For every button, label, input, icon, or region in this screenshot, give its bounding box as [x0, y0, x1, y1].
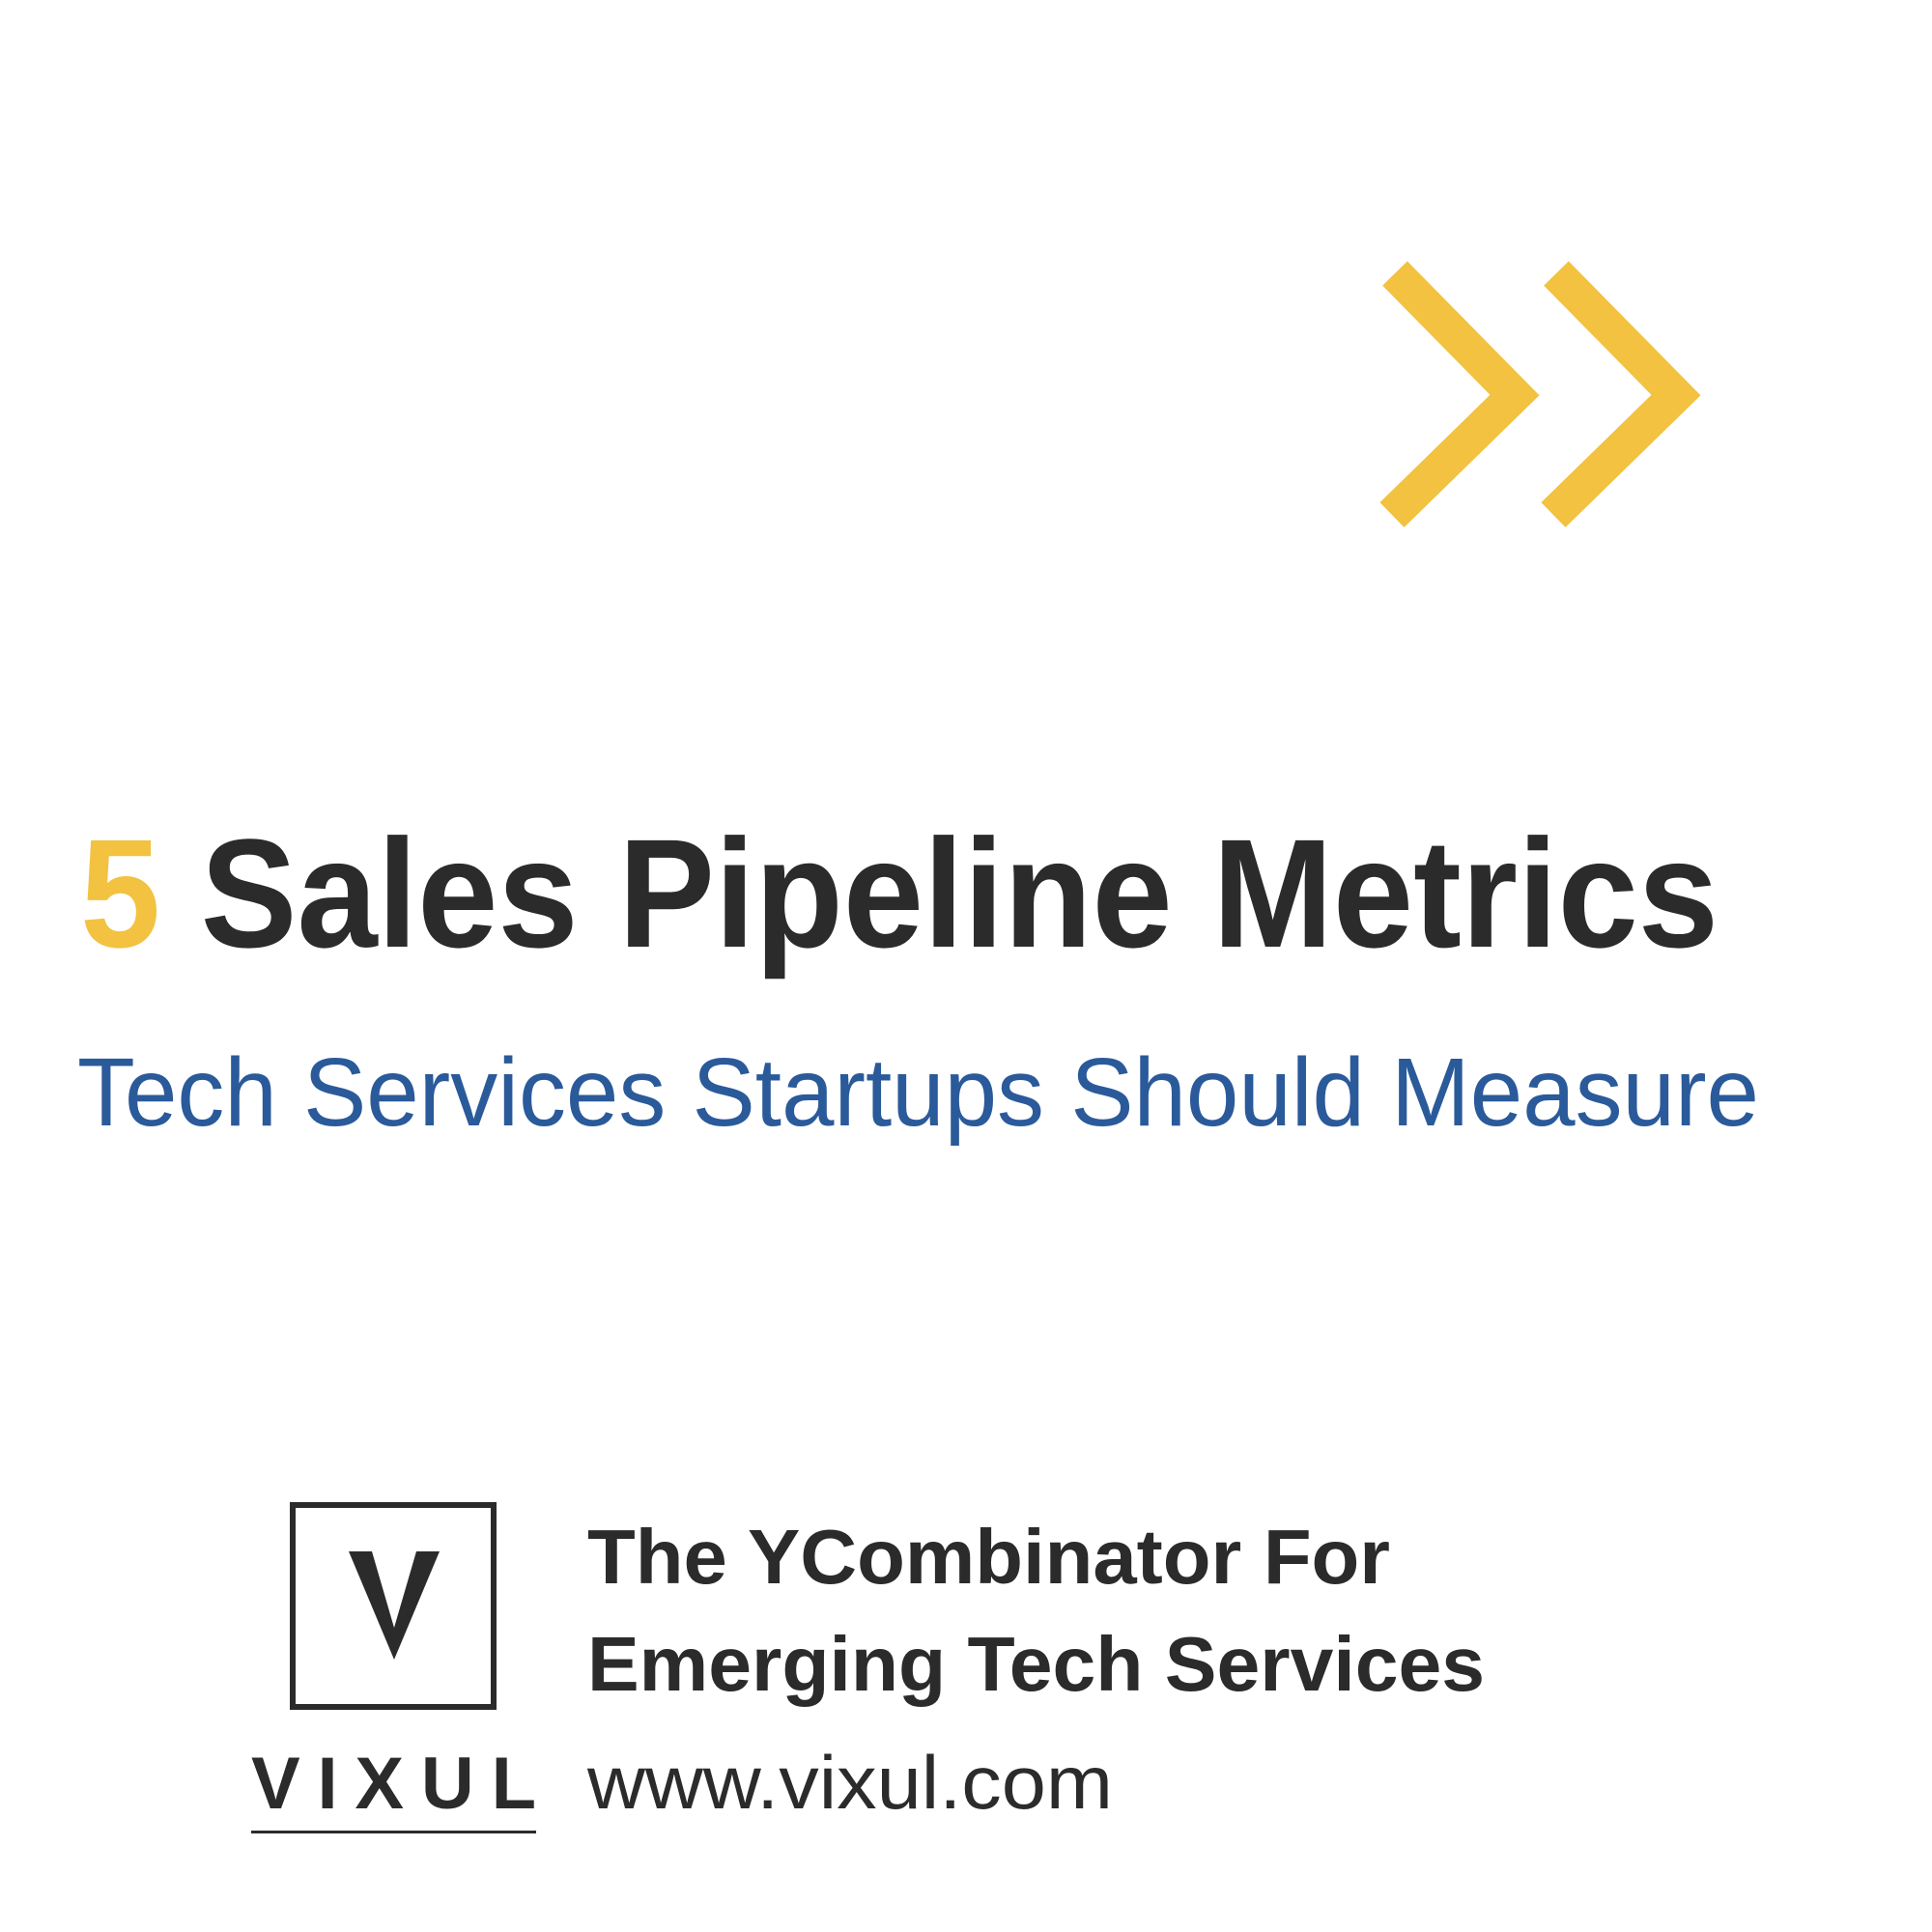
logo: Vixul: VIXUL: [251, 1743, 536, 1825]
subtitle: Tech Services Startups Should Measure: [77, 1038, 1759, 1147]
tagline: [586, 1514, 1485, 1825]
logo: Vixul: [251, 1505, 536, 1833]
icon: double chevron: [1392, 273, 1676, 515]
tagline: Emerging Tech Services: [587, 1621, 1485, 1707]
website: www.vixul.com: [586, 1740, 1113, 1825]
tagline: The YCombinator For: [587, 1514, 1390, 1600]
title: 5 Sales Pipeline Metrics: [80, 807, 1719, 980]
